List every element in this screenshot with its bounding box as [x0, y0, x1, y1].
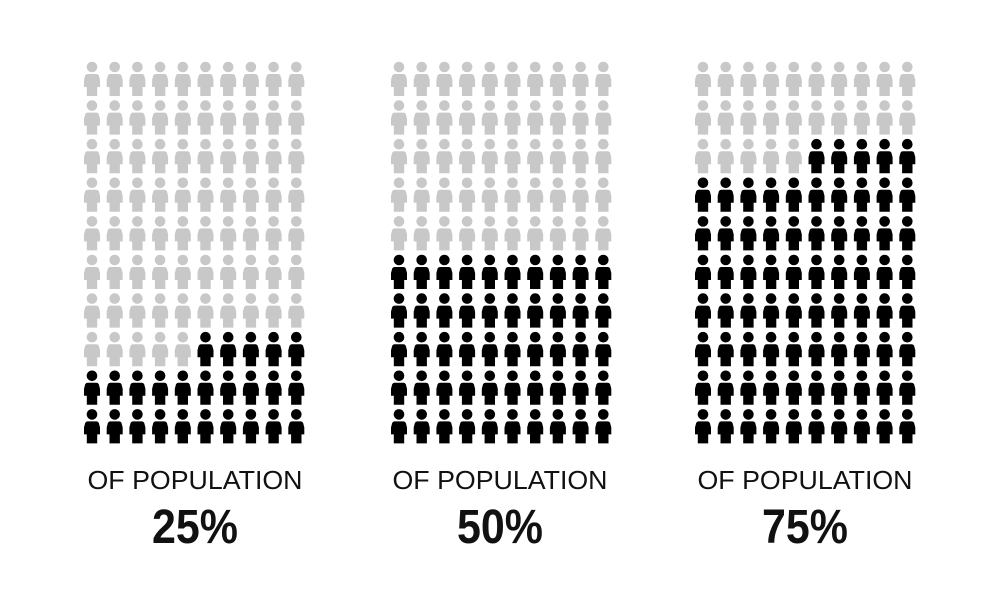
value: 50%: 50%	[457, 501, 543, 554]
label: of population: OF POPULATION	[392, 465, 608, 495]
icon grid: 25%	[84, 62, 304, 443]
panel: 75%	[695, 62, 915, 554]
panel: 25%	[84, 62, 304, 554]
label: of population: OF POPULATION	[698, 465, 912, 495]
icon grid: 50%	[391, 62, 611, 443]
label: of population: OF POPULATION	[88, 465, 302, 495]
icon grid: 75%	[695, 62, 915, 443]
value: 25%: 25%	[152, 501, 238, 554]
value: 75%: 75%	[762, 501, 848, 554]
panel: 50%	[391, 62, 611, 554]
